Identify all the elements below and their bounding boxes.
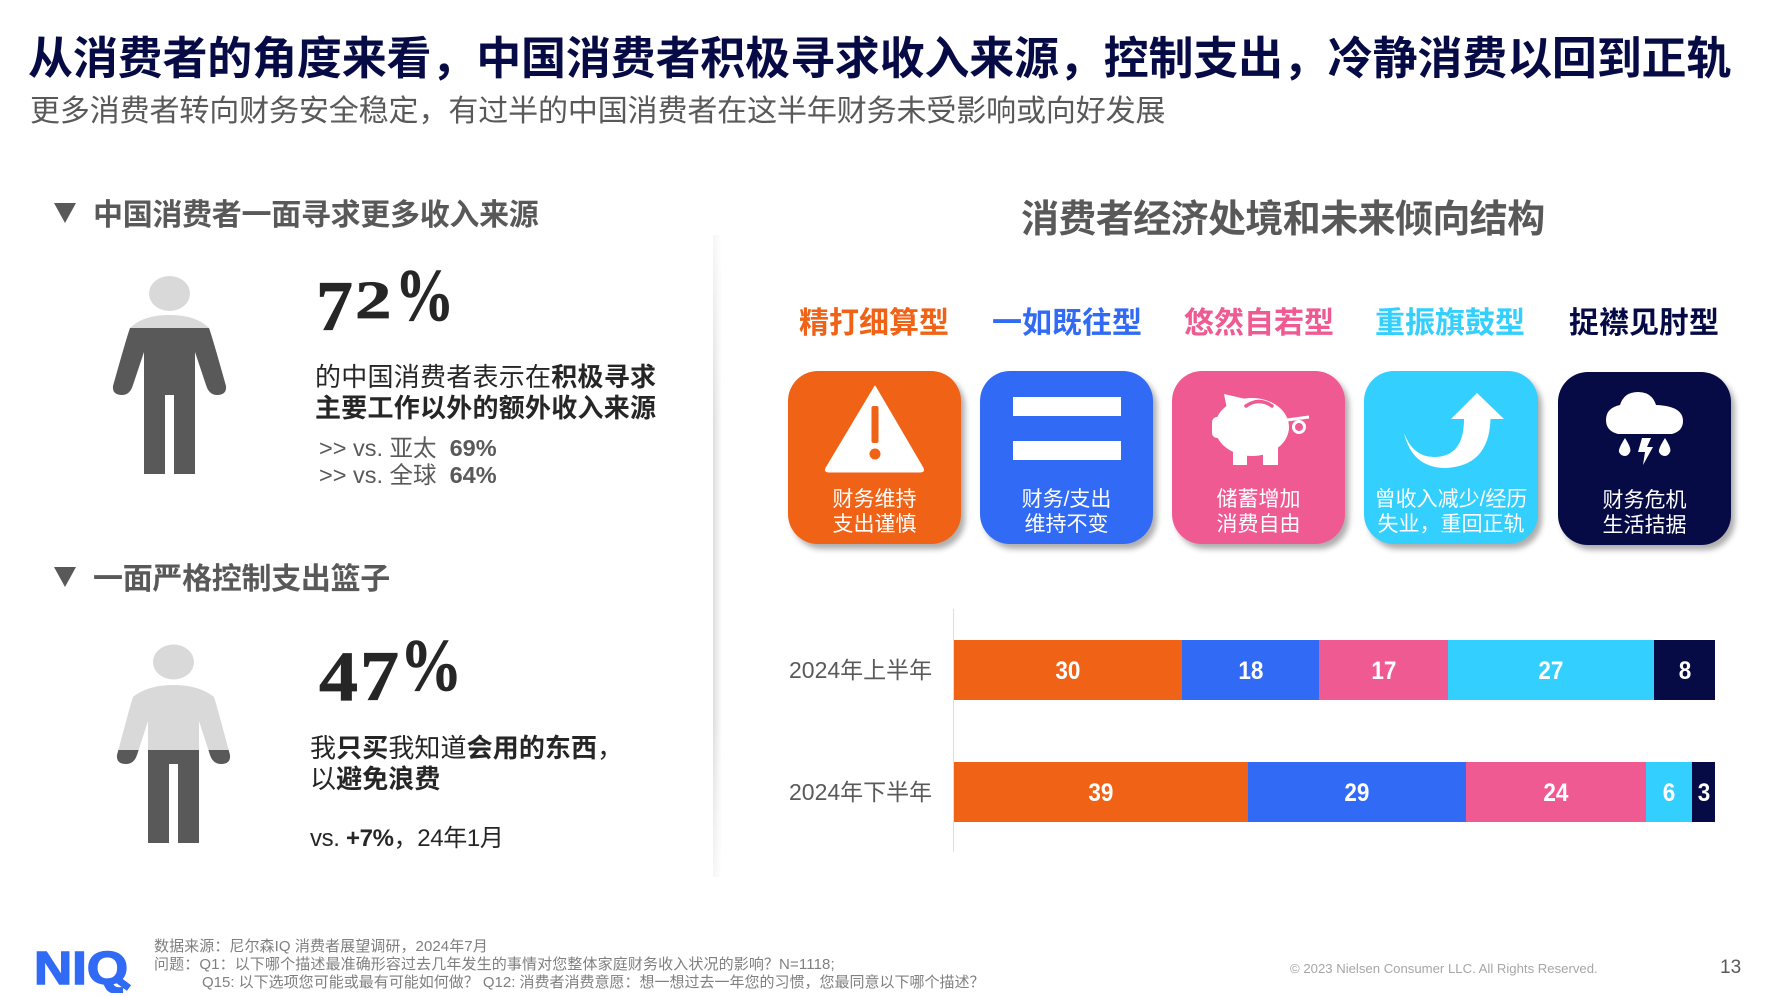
title: 从消费者的角度来看，中国消费者积极寻求收入来源，控制支出，冷静消费以回到正轨 xyxy=(28,33,1731,84)
text: comparison xyxy=(319,435,497,488)
segment 18 xyxy=(1182,640,1319,700)
label: type 3: 悠然自若型 xyxy=(1184,307,1334,340)
segment 39: 39 xyxy=(1088,779,1114,807)
icon: up arrow xyxy=(1404,393,1504,468)
card: 储蓄增加: 储蓄增加 xyxy=(1216,488,1300,511)
text: comparison: >> vs. 全球 64% xyxy=(319,462,497,488)
text: comparison: >> vs. 亚太 69% xyxy=(319,435,497,461)
segment 29 xyxy=(1248,762,1466,822)
bar: second half xyxy=(954,762,1715,822)
stacked bar chart xyxy=(789,609,1715,852)
segment 17 xyxy=(1319,640,1448,700)
segment 3 xyxy=(1692,762,1715,822)
row label: first half: 2024年上半年 xyxy=(789,657,932,683)
card: 财务危机 xyxy=(1558,372,1731,545)
icon: piggy bank xyxy=(1212,394,1310,465)
stat: 72%: 2 xyxy=(355,270,391,330)
label: type 5: 捉襟见肘型 xyxy=(1569,307,1719,340)
text: income description xyxy=(315,362,656,423)
heading: income: 中国消费者一面寻求更多收入来源 xyxy=(93,199,538,232)
label: type 4: 重振旗鼓型 xyxy=(1375,307,1525,340)
segment 27: 27 xyxy=(1538,657,1564,685)
footnote: 问题：Q1：以下哪个描述最准确形容过去几年发生的事情对您整体家庭财务收入状况的影响？N=1118; xyxy=(154,956,835,973)
text: spending description: 以避免浪费 xyxy=(310,764,441,794)
stat: 47% xyxy=(319,630,462,710)
segment 8 xyxy=(1654,640,1715,700)
stat: 72% xyxy=(316,260,454,340)
footnote xyxy=(154,938,985,991)
page number: 13 xyxy=(1720,957,1741,978)
segment 24: 24 xyxy=(1543,779,1569,807)
segment 6: 6 xyxy=(1663,779,1675,807)
card: 曾收入减少: 曾收入减少/经历 xyxy=(1375,488,1527,511)
segment 24 xyxy=(1466,762,1646,822)
segment 17: 17 xyxy=(1371,657,1396,685)
row label: second half: 2024年下半年 xyxy=(789,779,932,805)
text: vs january: vs. +7%，24年1月 xyxy=(310,825,504,852)
panel: consumer structure xyxy=(788,199,1738,554)
card: 财务/支出: 财务/支出 xyxy=(1022,488,1111,511)
card: 财务危机: 生活拮据 xyxy=(1602,514,1686,537)
copyright: © 2023 Nielsen Consumer LLC. All Rights Reserved. xyxy=(1290,961,1598,976)
card: 财务维持 xyxy=(788,371,961,544)
icon: storm cloud xyxy=(1606,392,1683,465)
divider between panels xyxy=(713,235,720,877)
label: type 2: 一如既往型 xyxy=(992,307,1142,340)
segment 30: 30 xyxy=(1055,657,1081,685)
segment 18: 18 xyxy=(1238,657,1263,685)
segment 29: 29 xyxy=(1344,779,1370,807)
label: type 1: 精打细算型 xyxy=(799,307,949,340)
card: 曾收入减少: 失业，重回正轨 xyxy=(1378,513,1524,536)
bar: first half xyxy=(954,640,1715,700)
icon: warning triangle xyxy=(824,386,924,472)
card: 储蓄增加: 消费自由 xyxy=(1216,513,1300,536)
icon: person 72 percent xyxy=(112,276,226,474)
chart heading: 消费者经济处境和未来倾向结构 xyxy=(1021,199,1545,241)
card: 财务维持: 财务维持 xyxy=(832,488,916,511)
card: 财务维持: 支出谨慎 xyxy=(832,513,916,536)
subtitle: 更多消费者转向财务安全稳定，有过半的中国消费者在这半年财务未受影响或向好发展 xyxy=(30,95,1165,128)
segment 3: 3 xyxy=(1697,779,1710,807)
segment 8: 8 xyxy=(1678,657,1691,685)
card: 财务危机: 财务危机 xyxy=(1602,489,1686,512)
card: 储蓄增加 xyxy=(1172,371,1345,544)
text: spending description: 我只买我知道会用的东西， xyxy=(310,733,623,763)
panel: income xyxy=(54,199,656,488)
panel: spending xyxy=(54,563,623,852)
axis line xyxy=(953,609,954,852)
text: income description: 的中国消费者表示在积极寻求 xyxy=(315,362,656,392)
segment 27 xyxy=(1448,640,1654,700)
footnote: Q15: 以下选项您可能或最有可能如何做？ Q12: 消费者消费意愿：想一想过去一年您的习惯，您最同意以下哪个描述？ xyxy=(202,974,985,991)
segment 30 xyxy=(954,640,1182,700)
text: spending description xyxy=(310,733,623,794)
segment 6 xyxy=(1646,762,1692,822)
card: 曾收入减少 xyxy=(1364,371,1538,544)
text: income description: 主要工作以外的额外收入来源 xyxy=(315,393,656,423)
icon: person 47 percent xyxy=(116,644,230,843)
card: 财务/支出 xyxy=(980,371,1153,544)
footnote: 数据来源：尼尔森IQ 消费者展望调研，2024年7月 xyxy=(154,938,488,955)
segment 39 xyxy=(954,762,1248,822)
card: 财务/支出: 维持不变 xyxy=(1024,513,1108,536)
icon: equals xyxy=(1013,397,1121,460)
heading: spending: 一面严格控制支出篮子 xyxy=(93,563,390,596)
